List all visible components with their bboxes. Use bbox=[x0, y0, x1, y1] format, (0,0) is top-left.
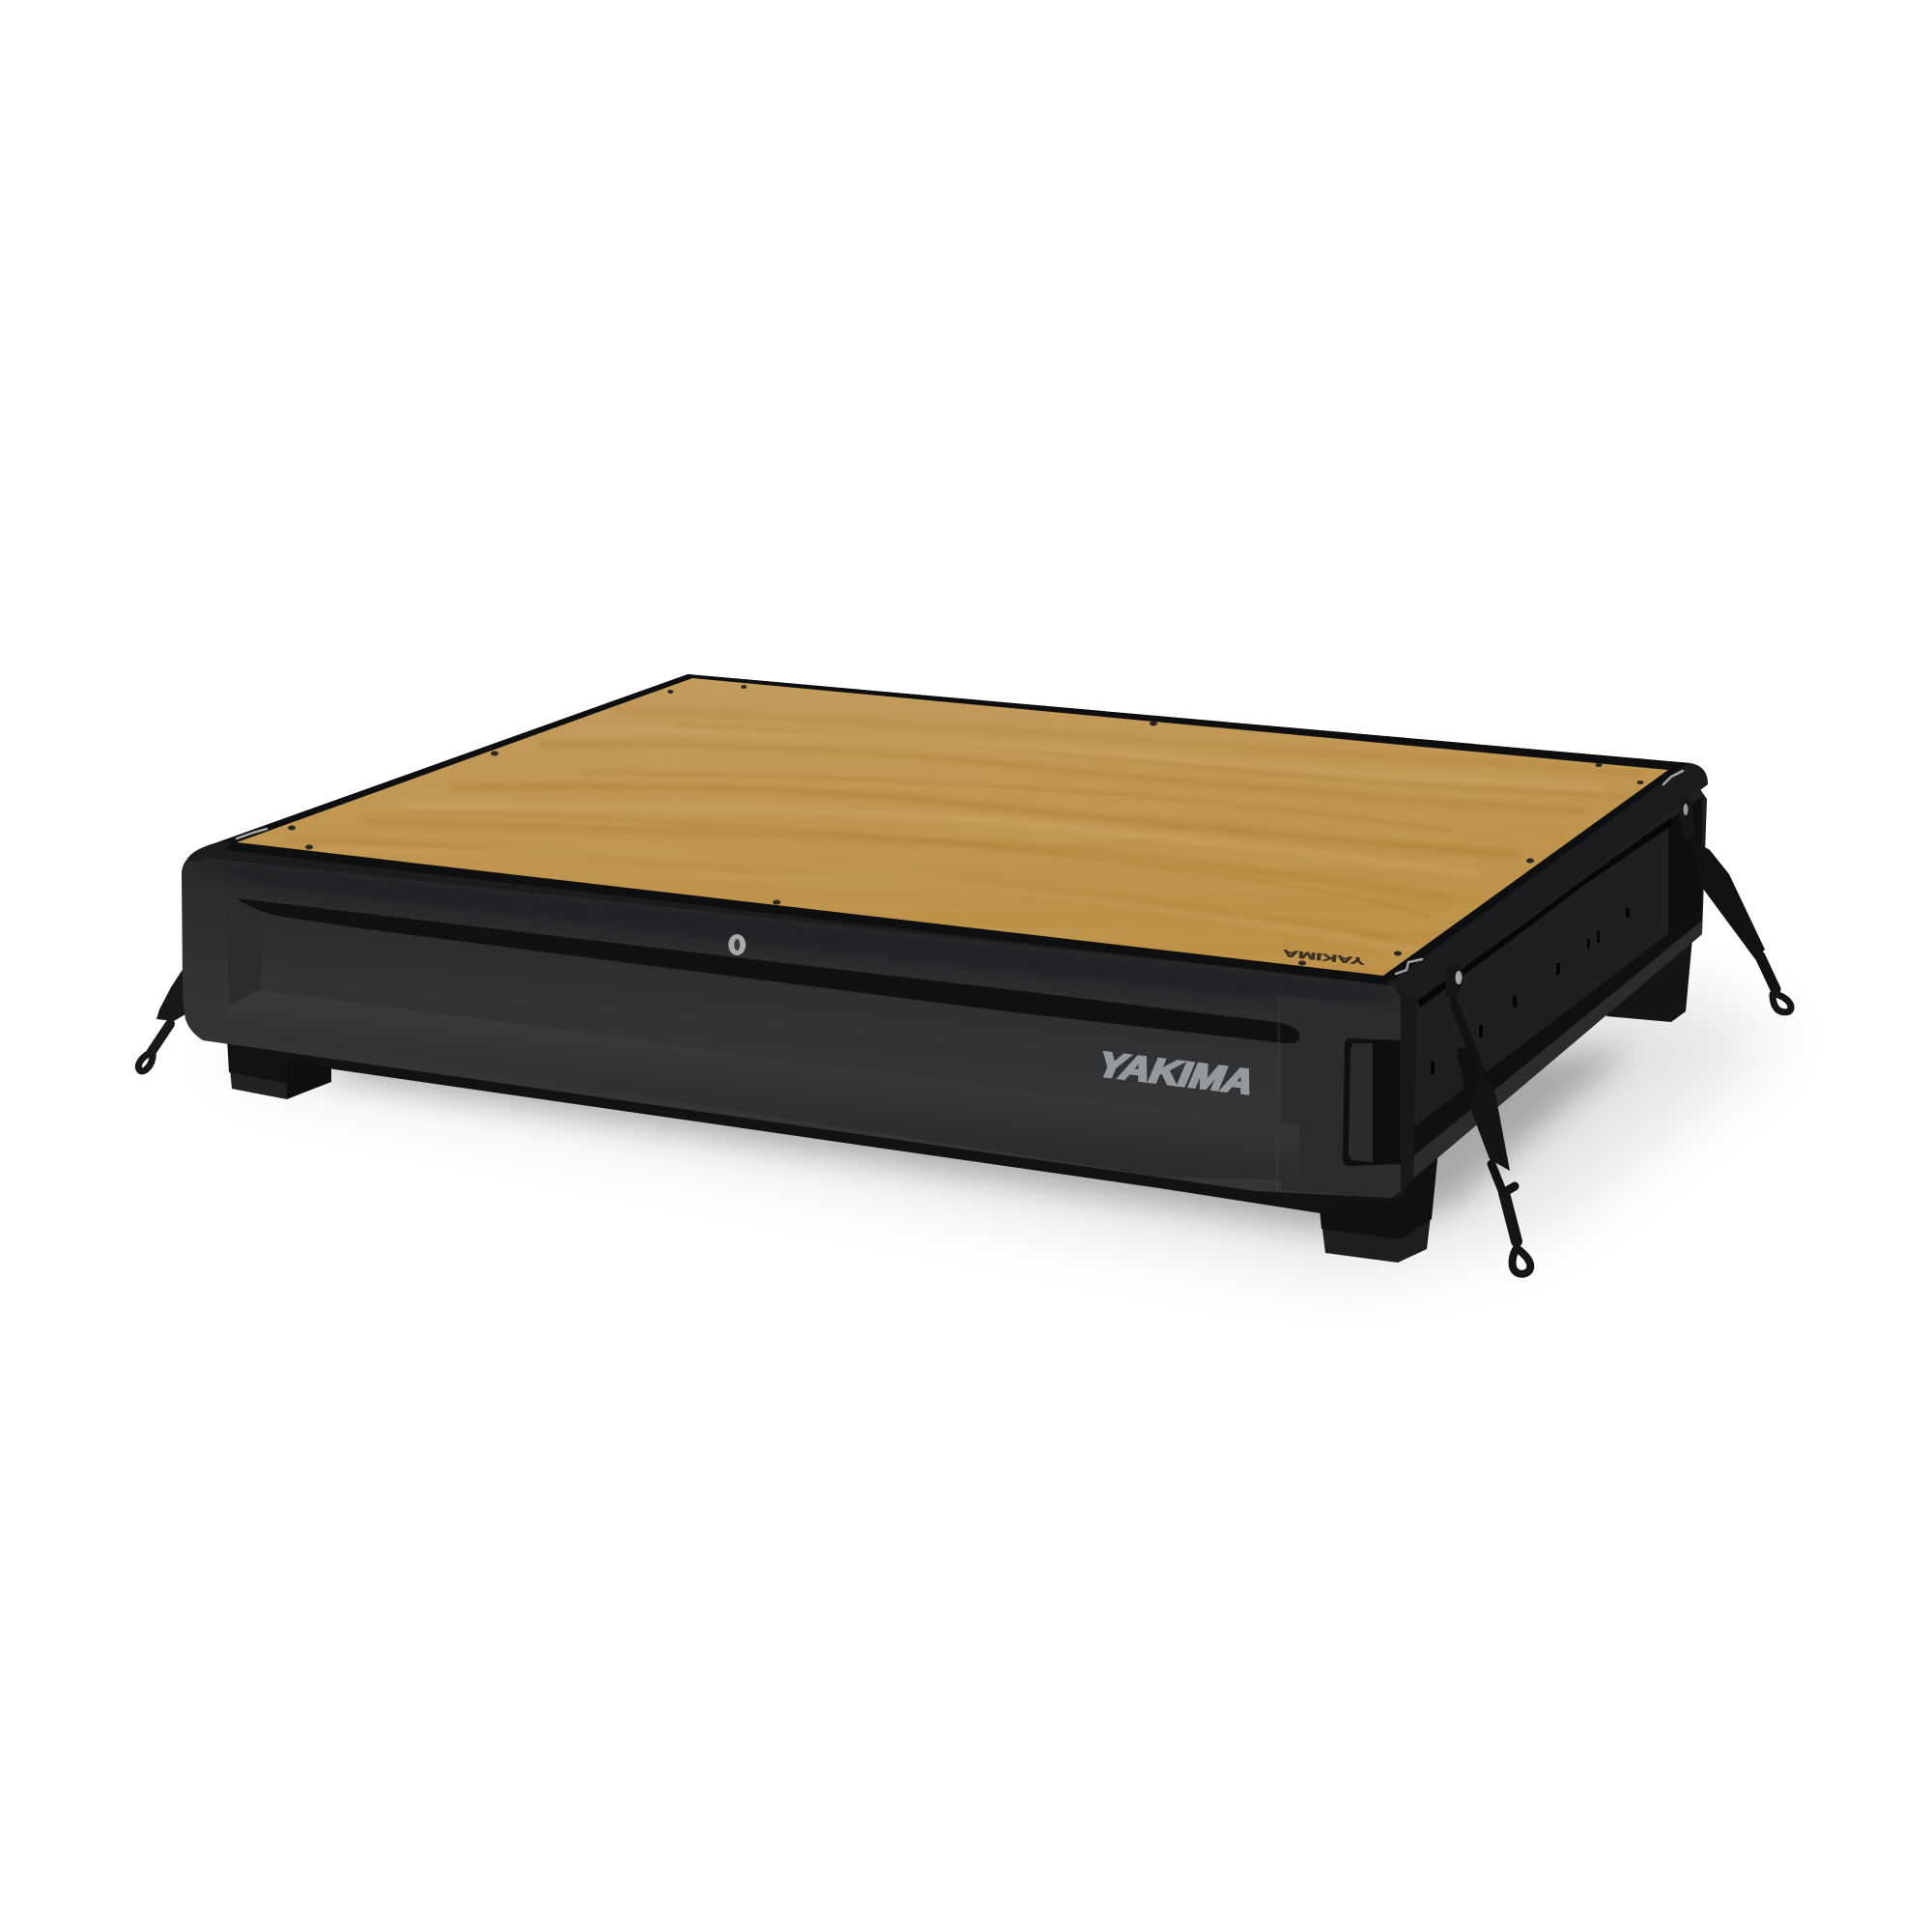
deck screws bbox=[288, 685, 1644, 966]
recess left wall bbox=[225, 903, 266, 1005]
panel: front face bbox=[182, 853, 1403, 1198]
deck logo mark: YAKIMA bbox=[1283, 947, 1365, 966]
lower lip bbox=[203, 990, 1299, 1180]
back recess bbox=[1668, 797, 1702, 945]
front foot dark band bbox=[1319, 1150, 1438, 1239]
wood front dark edge bbox=[224, 837, 1389, 985]
wood right dark edge bbox=[1378, 766, 1679, 981]
infographic: product render of storage deck bbox=[135, 674, 1795, 1285]
side track slot bbox=[1417, 817, 1674, 1008]
upper face shade bbox=[198, 860, 1391, 1005]
wood grain bbox=[242, 678, 1656, 964]
front corner backing bbox=[1377, 978, 1417, 1201]
right corner panel bbox=[1281, 995, 1401, 1198]
left strap bbox=[138, 968, 185, 1071]
front right strap bbox=[1446, 964, 1530, 1274]
logo: YAKIMA: YAKIMA bbox=[1092, 1045, 1262, 1101]
top rim bbox=[185, 674, 1708, 1001]
panel: side of deck bbox=[1413, 782, 1707, 1179]
panel: wood deck top bbox=[236, 678, 1685, 976]
lock bbox=[728, 934, 746, 955]
corner seam bbox=[1277, 995, 1279, 1190]
side hole markers bbox=[1431, 908, 1630, 1074]
side pillar at front corner bbox=[1401, 991, 1417, 1191]
side dark band bbox=[1413, 908, 1702, 1156]
handle bbox=[1343, 1038, 1403, 1166]
side rail bbox=[1413, 921, 1702, 1179]
back right strap bbox=[1680, 798, 1791, 1012]
corner brackets bbox=[237, 771, 1683, 974]
left foot bbox=[227, 1038, 331, 1099]
front foot bbox=[1319, 1150, 1438, 1263]
panel: body underside bbox=[203, 1024, 1413, 1213]
strap mount bbox=[1446, 964, 1463, 1005]
back right foot bbox=[1606, 927, 1693, 1022]
floor shadow bbox=[203, 976, 1787, 1275]
rim dark outlines bbox=[217, 674, 1690, 842]
recess dark band bbox=[237, 898, 1299, 1043]
